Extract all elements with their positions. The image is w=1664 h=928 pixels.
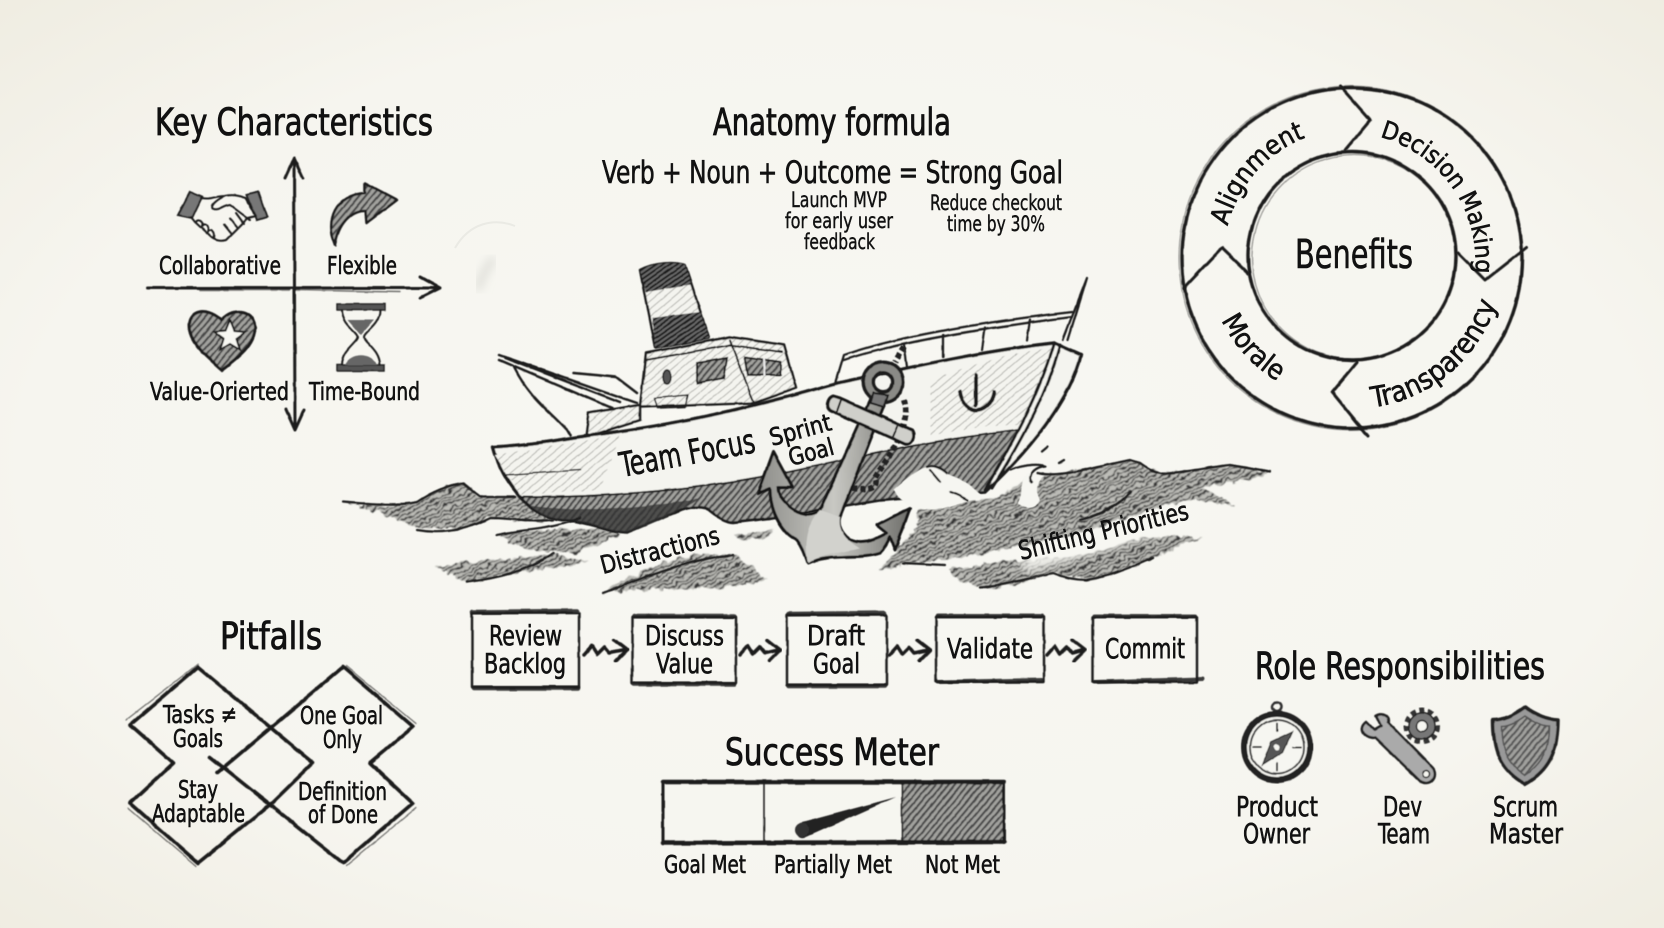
chevron dividers bbox=[1184, 86, 1527, 436]
pitfall: definition of done: of Done bbox=[308, 800, 378, 829]
heading: role responsibilities: Role Responsibilities bbox=[1255, 645, 1545, 688]
icon: curved arrow bbox=[331, 183, 397, 245]
label: dev team: Team bbox=[1377, 817, 1430, 850]
ship bbox=[493, 263, 1087, 532]
label: sprint goal: Sprint bbox=[766, 408, 834, 452]
arrow bbox=[740, 640, 780, 661]
label: partially met: Partially Met bbox=[774, 850, 892, 879]
sketch contour lines on waves bbox=[343, 460, 1270, 593]
center label: benefits: Benefits bbox=[1295, 232, 1413, 278]
arrow bbox=[1047, 640, 1085, 661]
label: dev team bbox=[1377, 790, 1430, 850]
segment: decision making: Decision Making bbox=[1382, 120, 1493, 272]
big anchor bbox=[758, 347, 914, 563]
icon: hourglass bbox=[337, 304, 385, 371]
process flow bbox=[472, 611, 1203, 688]
formula: Verb + Noun + Outcome = Strong Goal bbox=[602, 155, 1063, 191]
pitfall: definition of done: Definition bbox=[298, 777, 387, 806]
arrow bbox=[584, 640, 627, 661]
label: scrum master: Master bbox=[1489, 817, 1564, 850]
step: review backlog bbox=[472, 611, 579, 688]
icon: wrench and gear bbox=[1362, 711, 1437, 783]
label: team focus: Team Focus bbox=[616, 422, 758, 486]
step: draft goal: Goal bbox=[813, 647, 860, 680]
pitfall: stay adaptable: Adaptable bbox=[152, 799, 245, 828]
illustration: ship anchored in rough sea bbox=[343, 263, 1270, 593]
segment: transparency: Transparency bbox=[1368, 298, 1499, 407]
pitfall: one goal only: Only bbox=[323, 725, 362, 754]
panel: anatomy formula bbox=[602, 101, 1063, 254]
pitfall: tasks not goals: Goals bbox=[173, 724, 223, 753]
splash bbox=[893, 447, 1064, 510]
panel: pitfalls bbox=[126, 615, 416, 866]
step: discuss value bbox=[632, 616, 736, 684]
heading: key characteristics: Key Characteristics bbox=[155, 101, 433, 144]
pitfall: one goal only bbox=[300, 701, 383, 754]
panel: success meter bbox=[663, 731, 1004, 879]
example: launch mvp bbox=[785, 188, 893, 254]
step: commit bbox=[1093, 616, 1203, 682]
icon: heart with star bbox=[189, 312, 255, 370]
funnel bbox=[640, 263, 709, 348]
label: product owner: Product bbox=[1236, 790, 1318, 823]
pitfall: one goal only: One Goal bbox=[300, 701, 383, 730]
waves in front of the bow bbox=[880, 460, 1270, 588]
example: reduce checkout: time by 30% bbox=[947, 212, 1045, 236]
example: launch mvp: for early user bbox=[785, 209, 893, 233]
hull bbox=[493, 343, 1081, 532]
step: commit: Commit bbox=[1105, 632, 1185, 665]
label: collaborative: Collaborative bbox=[159, 251, 281, 280]
label: shifting priorities: Shifting Priorities bbox=[1016, 496, 1192, 567]
label: sprint goal bbox=[766, 408, 837, 472]
step: draft goal: Draft bbox=[807, 619, 865, 652]
meter bar bbox=[663, 782, 1004, 843]
quadrant axes bbox=[147, 158, 440, 430]
step: review backlog: Review bbox=[489, 619, 562, 652]
interlocking diamonds bbox=[126, 664, 416, 866]
label: time-bound: Time-Bound bbox=[308, 377, 420, 406]
icon: handshake bbox=[178, 192, 267, 241]
pitfall: stay adaptable: Stay bbox=[178, 775, 218, 804]
heading: anatomy formula: Anatomy formula bbox=[713, 101, 951, 144]
step: review backlog: Backlog bbox=[484, 647, 566, 680]
label: goal met: Goal Met bbox=[664, 850, 746, 879]
label: scrum master: Scrum bbox=[1493, 790, 1558, 823]
example: reduce checkout: Reduce checkout bbox=[930, 191, 1062, 215]
step: discuss value: Discuss bbox=[645, 619, 724, 652]
step: validate bbox=[936, 616, 1044, 682]
label: flexible: Flexible bbox=[327, 251, 397, 280]
pitfall: tasks not goals: Tasks ≠ bbox=[162, 700, 237, 729]
needle bbox=[795, 797, 896, 838]
label: product owner: Owner bbox=[1243, 817, 1311, 850]
example: launch mvp: feedback bbox=[804, 230, 875, 254]
label: sprint goal: Goal bbox=[785, 433, 837, 472]
label: distractions: Distractions bbox=[597, 521, 723, 580]
waves behind the ship bbox=[343, 483, 773, 593]
step: validate: Validate bbox=[947, 632, 1033, 665]
cabin bbox=[586, 337, 796, 437]
arrow bbox=[889, 640, 930, 661]
railing and mast bbox=[835, 278, 1087, 385]
label: product owner bbox=[1236, 790, 1318, 850]
derrick bbox=[499, 355, 637, 435]
panel: benefits ring bbox=[1178, 84, 1529, 438]
label: dev team: Dev bbox=[1383, 790, 1422, 823]
small anchor emblem bbox=[960, 375, 994, 410]
label: scrum master bbox=[1489, 790, 1564, 850]
icon: shield bbox=[1493, 707, 1558, 784]
panel: key characteristics bbox=[147, 101, 440, 430]
example: launch mvp: Launch MVP bbox=[791, 188, 887, 212]
pitfall: stay adaptable bbox=[152, 775, 245, 828]
heading: success meter: Success Meter bbox=[725, 731, 939, 774]
step: discuss value: Value bbox=[656, 647, 713, 680]
hull hatching bbox=[495, 343, 1060, 532]
example: reduce checkout bbox=[930, 191, 1062, 236]
heading: pitfalls: Pitfalls bbox=[220, 615, 322, 658]
paper gaps behind wave labels bbox=[1020, 512, 1195, 572]
label: value-oriented: Value-Orierted bbox=[150, 377, 289, 406]
segment: alignment: Alignment bbox=[1210, 122, 1306, 226]
segment: morale: Morale bbox=[1222, 312, 1283, 380]
step: draft goal bbox=[787, 613, 887, 686]
pitfall: tasks not goals bbox=[162, 700, 237, 753]
pitfall: definition of done bbox=[298, 777, 387, 829]
ring outlines bbox=[1179, 86, 1523, 430]
label: not met: Not Met bbox=[925, 850, 1000, 879]
panel: role responsibilities bbox=[1236, 645, 1564, 850]
icon: compass bbox=[1244, 702, 1310, 780]
